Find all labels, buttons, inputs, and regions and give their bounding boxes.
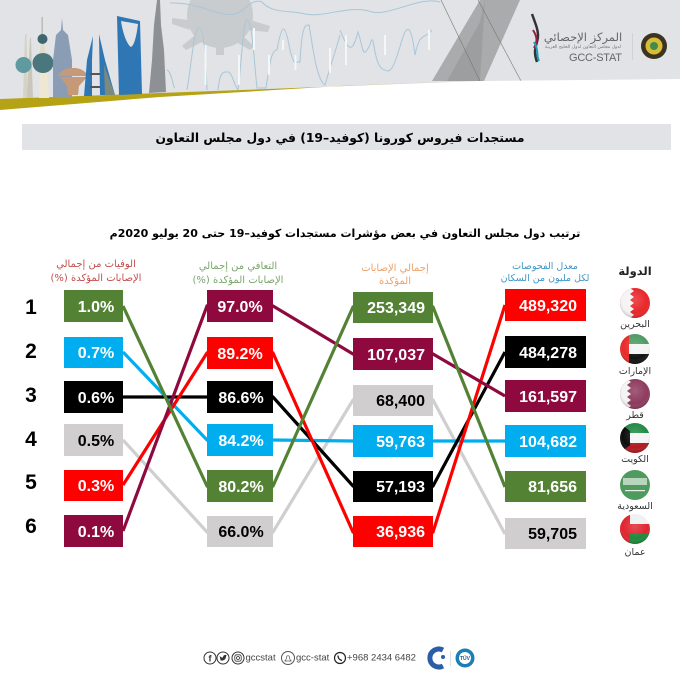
column: recovery: 80.2% [218, 479, 264, 496]
logo: GCC-STAT: لدول مجلس التعاون لدول الخليج العربية [545, 45, 621, 50]
icon: twitter [217, 652, 229, 664]
column: total cases: 68,400 [376, 393, 425, 410]
column: deaths: 0.6% [78, 390, 114, 407]
flag: Oman: عمان [624, 547, 646, 558]
column heading: deaths [51, 259, 141, 284]
column: deaths [64, 290, 123, 547]
column heading: total cases [361, 263, 429, 287]
column: deaths: 0.1% [78, 524, 114, 541]
connector lines [123, 305, 505, 534]
column heading: recovery: الإصابات المؤكدة (%) [193, 275, 283, 286]
subtitle: ترتيب دول مجلس التعاون في بعض مؤشرات مستجدات كوفيد–19 حتى 20 يوليو 2020م [110, 227, 580, 240]
logo: GCC-STAT: المركز الإحصائي [544, 30, 622, 45]
column heading: total cases: المؤكدة [379, 276, 411, 287]
flag: UAE [619, 334, 651, 377]
flag: Kuwait: الكويت [621, 454, 649, 465]
column heading: deaths: الوفيات من إجمالي [56, 259, 136, 270]
column: deaths: 1.0% [78, 299, 114, 316]
title bar [22, 124, 671, 150]
column heading: recovery [193, 261, 283, 286]
column: tests: 81,656 [528, 479, 577, 496]
logo: GCC-STAT [532, 14, 667, 64]
rank numbers: 4 [25, 428, 37, 451]
column heading: tests [501, 261, 589, 284]
column heading: deaths: الإصابات المؤكدة (%) [51, 273, 141, 284]
column: total cases: 36,936 [376, 524, 425, 541]
footer contacts [204, 648, 474, 668]
flag: Saudi Arabia: السعودية [617, 501, 653, 512]
title bar: مستجدات فيروس كورونا (كوفيد–19) في دول مجلس التعاون [156, 131, 524, 145]
line: UAE [123, 352, 505, 486]
column: recovery: 97.0% [217, 299, 263, 316]
flag: Kuwait [620, 423, 650, 465]
flag: Qatar [620, 379, 650, 421]
line: Oman [123, 400, 505, 534]
line: Kuwait [123, 352, 505, 441]
rank numbers: 2 [25, 340, 37, 363]
icon: facebook [204, 652, 216, 664]
column heading: country: الدولة [618, 264, 652, 279]
grey ribbon [432, 0, 521, 81]
icon: GCC emblem [641, 33, 667, 59]
logo: TUV seal [456, 648, 474, 668]
phone number: +968 2434 6482 [347, 652, 416, 664]
flag: Oman [620, 514, 650, 558]
column: total cases [353, 292, 433, 547]
column: deaths: 0.7% [78, 345, 114, 362]
icon: skyline [16, 0, 166, 98]
column: deaths: 0.5% [78, 433, 114, 450]
rank numbers: 5 [25, 471, 37, 494]
line: Bahrain [123, 305, 505, 532]
logo: certification C [430, 649, 445, 667]
icon: whatsapp [334, 652, 346, 664]
line: Saudi [123, 306, 505, 487]
white chart bars [204, 28, 430, 85]
column heading: total cases: إجمالي الإصابات [361, 263, 429, 274]
icon: instagram [232, 652, 244, 664]
column: recovery: 89.2% [217, 346, 263, 363]
icon: facebook: f [208, 654, 212, 664]
column: recovery: 66.0% [218, 524, 264, 541]
virus background [172, 0, 270, 55]
rank numbers: 6 [25, 515, 37, 538]
line chart background [167, 1, 440, 90]
column heading: recovery: التعافي من إجمالي [199, 261, 277, 272]
rank numbers: 1 [25, 296, 37, 319]
column: recovery: 84.2% [218, 433, 264, 450]
gold band [0, 80, 480, 110]
column: total cases: 59,763 [376, 434, 425, 451]
header banner [0, 0, 680, 110]
line: Qatar [123, 306, 505, 531]
column heading: tests: معدل الفحوصات [512, 261, 578, 272]
handle: gccstat: gccstat [246, 652, 276, 664]
column: recovery [207, 290, 273, 547]
handle: gcc-stat: gcc-stat [296, 652, 330, 664]
flag: Saudi Arabia [617, 470, 653, 512]
column: total cases: 57,193 [376, 479, 425, 496]
column: tests: 484,278 [519, 345, 577, 362]
logo: TUV seal: TÜV [460, 655, 471, 662]
column: recovery: 86.6% [218, 390, 264, 407]
logo: GCC-STAT: GCC-STAT [569, 52, 622, 64]
flag: UAE: الإمارات [619, 366, 651, 377]
column: total cases: 107,037 [367, 347, 425, 364]
column: tests: 59,705 [528, 526, 577, 543]
rank numbers [25, 296, 37, 538]
column: tests: 161,597 [519, 389, 577, 406]
icon: snapchat [282, 652, 294, 664]
column: tests: 104,682 [519, 434, 577, 451]
column: total cases: 253,349 [367, 300, 425, 317]
column: tests [505, 289, 586, 549]
flag: Bahrain: البحرين [620, 319, 650, 330]
flag: Qatar: قطر [625, 410, 644, 421]
column: tests: 489,320 [519, 298, 577, 315]
flag: Bahrain [620, 288, 650, 330]
column: deaths: 0.3% [78, 478, 114, 495]
rank numbers: 3 [25, 384, 37, 407]
column heading: tests: لكل مليون من السكان [501, 273, 589, 284]
